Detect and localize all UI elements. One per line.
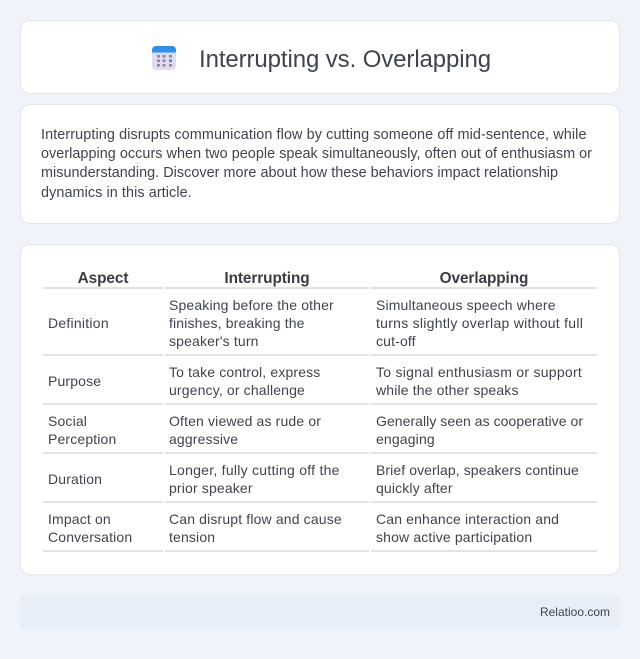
row: purpose: To signal enthusiasm or support — [376, 364, 582, 380]
row: definition: Definition — [48, 315, 109, 331]
intro text: overlapping occurs when two people speak simultaneously, often out of enthusiasm or — [41, 146, 592, 162]
row: definition: Simultaneous speech where — [376, 297, 556, 313]
row: social perception: Perception — [48, 431, 116, 447]
intro card — [20, 104, 620, 224]
row: duration: Duration — [48, 471, 102, 487]
row: impact on conversation — [48, 511, 559, 545]
row: social perception: Social — [48, 413, 87, 429]
row: impact on conversation: Can disrupt flow and cause — [169, 511, 342, 527]
row: social perception: Generally seen as cooperative or — [376, 413, 583, 429]
row: social perception: Often viewed as rude or — [169, 413, 321, 429]
row: definition: cut-off — [376, 333, 416, 349]
row: impact on conversation: tension — [169, 529, 215, 545]
row: definition — [48, 297, 583, 349]
row: impact on conversation: show active participation — [376, 529, 532, 545]
row: impact on conversation: Impact on — [48, 511, 111, 527]
row: definition: finishes, breaking the — [169, 315, 305, 331]
row: purpose: while the other speaks — [376, 382, 519, 398]
row: impact on conversation: Can enhance interaction and — [376, 511, 559, 527]
table header — [78, 270, 528, 287]
table card — [20, 244, 620, 575]
footer bar — [20, 595, 620, 629]
comparison table — [43, 270, 597, 552]
table header: Overlapping — [440, 270, 528, 287]
row: purpose: Purpose — [48, 373, 101, 389]
intro card: dynamics in this article. — [41, 185, 192, 201]
row: definition: speaker's turn — [169, 333, 259, 349]
row: purpose: To take control, express — [169, 364, 320, 380]
row: purpose: urgency, or challenge — [169, 382, 305, 398]
row: duration: prior speaker — [169, 480, 253, 496]
row: duration: Longer, fully cutting off the — [169, 462, 340, 478]
row: purpose — [48, 364, 582, 398]
footer credit: Relatioo.com — [540, 605, 610, 619]
row: definition: Speaking before the other — [169, 297, 334, 313]
row: social perception — [48, 413, 583, 447]
row: social perception: aggressive — [169, 431, 238, 447]
row: social perception: engaging — [376, 431, 435, 447]
title: Interrupting vs. Overlapping — [199, 46, 491, 73]
intro text — [41, 127, 592, 201]
table header: Aspect — [78, 270, 128, 287]
row: definition: turns slightly overlap without full — [376, 315, 583, 331]
row: duration: Brief overlap, speakers continue — [376, 462, 579, 478]
table header: Interrupting — [224, 270, 310, 287]
row: duration: quickly after — [376, 480, 453, 496]
row: impact on conversation: Conversation — [48, 529, 132, 545]
intro text: misunderstanding. Discover more about how these behaviors impact relationship — [41, 165, 558, 181]
icon: calendar — [152, 46, 176, 70]
row: duration — [48, 462, 579, 496]
intro text: Interrupting disrupts communication flow by cutting someone off mid-sentence, while — [41, 127, 587, 143]
title card — [20, 20, 620, 94]
